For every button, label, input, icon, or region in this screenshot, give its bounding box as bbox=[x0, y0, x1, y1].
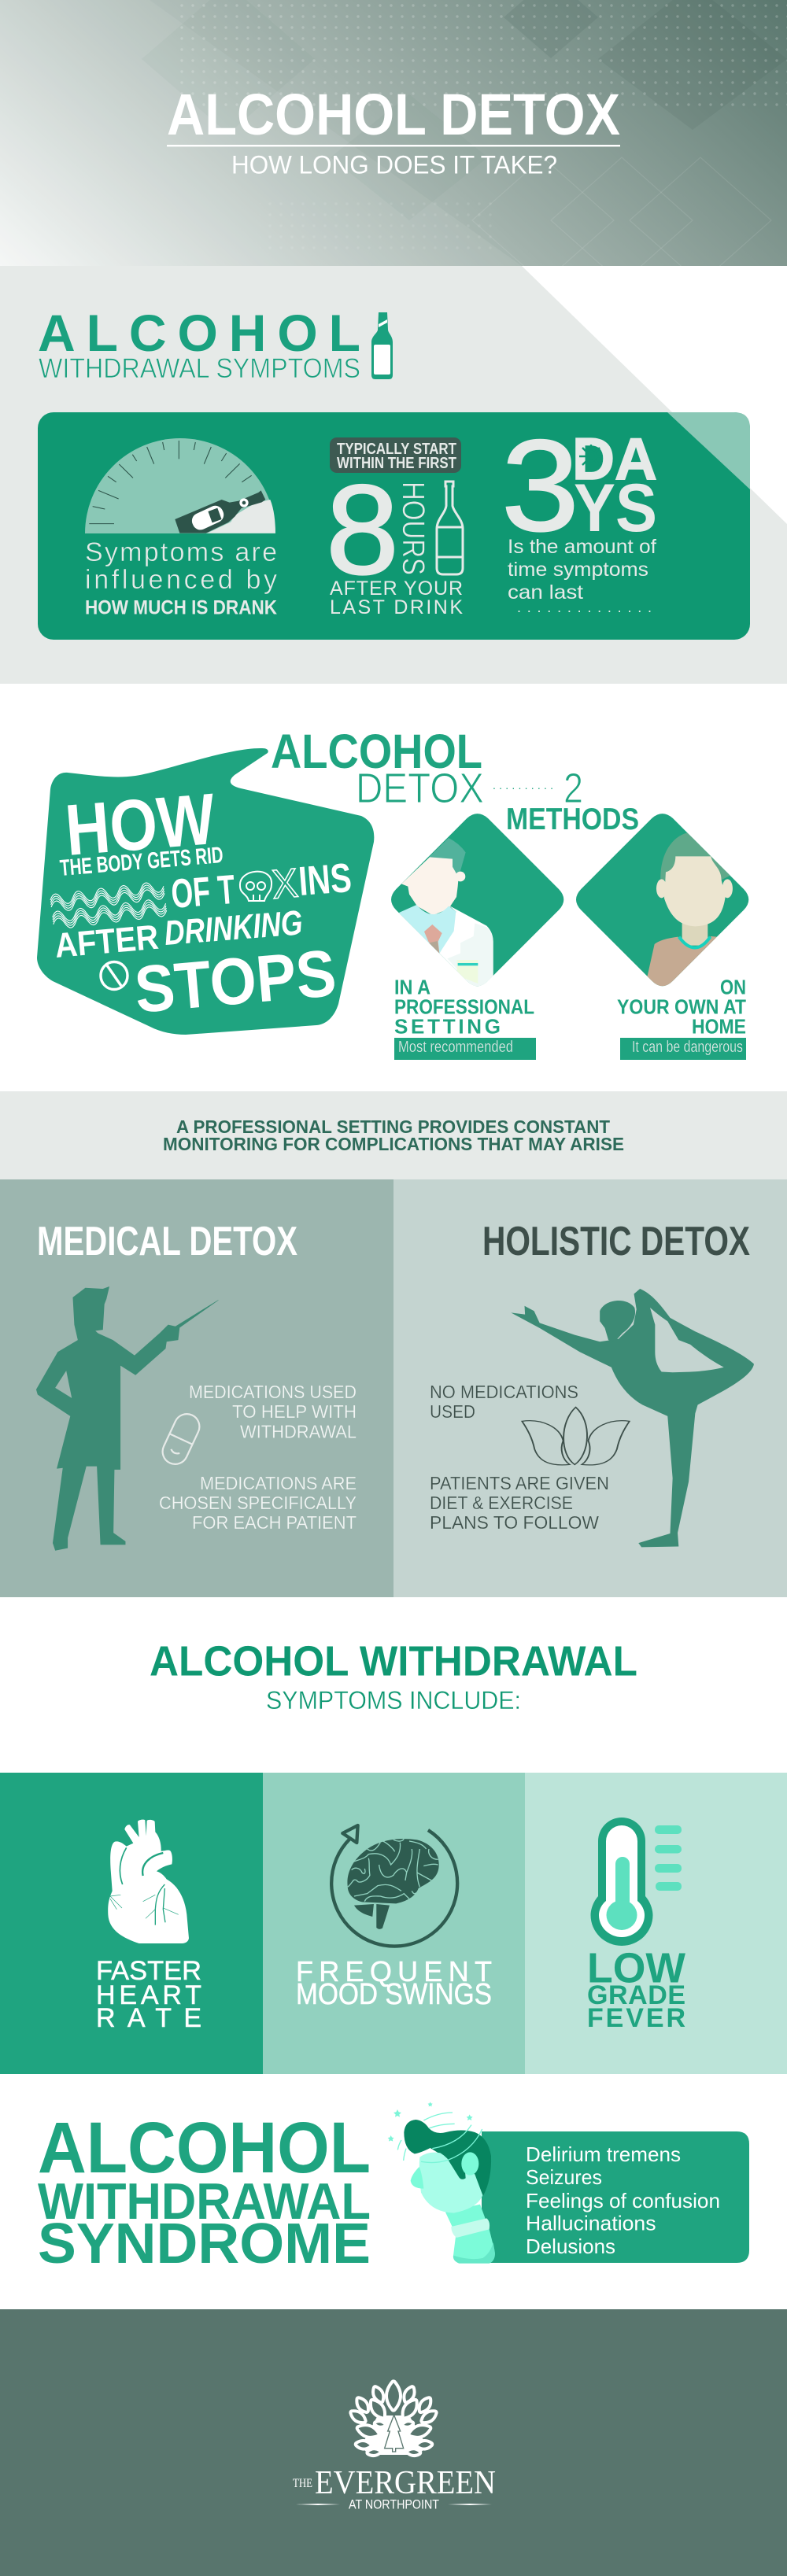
panel: speech bubble bbox=[37, 748, 374, 1035]
text: faster heart rate: HEART bbox=[96, 1980, 201, 2010]
panel: medical detox bbox=[0, 1179, 394, 1597]
text: in a professional setting: IN A bbox=[394, 976, 430, 999]
icon: dizzy head bbox=[388, 2102, 495, 2264]
panel: syndrome symptom list bbox=[482, 2131, 749, 2263]
logo text: the evergreen at northpoint: THE bbox=[293, 2477, 312, 2490]
text: symptoms are influenced by: Symptoms are bbox=[85, 537, 277, 567]
text: of t: OF T bbox=[169, 867, 237, 917]
text: medications used: WITHDRAWAL bbox=[240, 1421, 357, 1441]
panel: footer bbox=[0, 2309, 787, 2576]
stat: 8 hours: 8 bbox=[326, 459, 399, 601]
panel: syndrome symptom list: Hallucinations bbox=[526, 2211, 656, 2235]
text: symptoms are influenced by: HOW MUCH IS DRANK bbox=[85, 596, 277, 618]
panel: low grade fever bbox=[525, 1773, 787, 2074]
text: symptoms are influenced by bbox=[85, 537, 277, 618]
panel: holistic detox bbox=[394, 1179, 787, 1597]
panel: frequent mood swings bbox=[263, 1773, 525, 2074]
panel: syndrome symptom list: Seizures bbox=[526, 2165, 602, 2189]
panel: withdrawal symptoms section background bbox=[0, 266, 787, 684]
text: symptoms are influenced by: influenced by bbox=[85, 565, 277, 595]
text: the body gets rid: THE BODY GETS RID bbox=[59, 843, 224, 881]
panel: professional setting note: MONITORING FOR COMPLICATIONS THAT MAY ARISE bbox=[163, 1134, 624, 1154]
label: most recommended: Most recommended bbox=[398, 1039, 513, 1056]
label: typically start pill: WITHIN THE FIRST bbox=[337, 455, 456, 472]
icon: brain in cycle arrow bbox=[331, 1825, 457, 1947]
text: low grade fever: LOW bbox=[587, 1945, 685, 1992]
label: typically start pill: TYPICALLY START bbox=[337, 441, 456, 458]
text: in a professional setting: SETTING bbox=[394, 1015, 501, 1039]
icon: doctor with pointer silhouette bbox=[36, 1286, 218, 1551]
heading: alcohol detox 2 methods bbox=[271, 725, 639, 836]
icon: at home person diamond bbox=[576, 814, 748, 991]
text: after: AFTER bbox=[54, 918, 160, 965]
text: diet and exercise plans: PATIENTS ARE GIVEN bbox=[430, 1473, 609, 1493]
heading: alcohol withdrawal syndrome: WITHDRAWAL bbox=[38, 2172, 371, 2230]
stat: 8 hours: HOURS bbox=[396, 482, 430, 575]
heading: alcohol withdrawal syndrome bbox=[38, 2108, 371, 2275]
heading: alcohol withdrawal syndrome: ALCOHOL bbox=[38, 2108, 371, 2188]
text: amount of time bbox=[508, 536, 656, 615]
text: low grade fever: GRADE bbox=[587, 1980, 685, 2010]
icon: sun burst bbox=[579, 445, 603, 468]
icon: heart bbox=[108, 1820, 189, 1943]
heading: alcohol detox 2 methods: ALCOHOL bbox=[271, 725, 482, 778]
text: no medications used: USED bbox=[430, 1401, 475, 1422]
logo text: the evergreen at northpoint bbox=[293, 2465, 496, 2511]
text: drinking: DRINKING bbox=[163, 903, 304, 953]
logo: evergreen peacock emblem bbox=[350, 2382, 437, 2455]
text: amount of time: Is the amount of bbox=[508, 536, 656, 558]
text: how: HOW bbox=[62, 779, 218, 871]
text: after your last drink bbox=[330, 578, 463, 618]
panel: green stats card bbox=[38, 412, 750, 640]
text: diet and exercise plans: DIET & EXERCISE bbox=[430, 1493, 573, 1513]
heading: alcohol detox 2 methods: 2 bbox=[563, 765, 583, 812]
heading: alcohol withdrawal symptoms: WITHDRAWAL SYMPTOMS bbox=[39, 353, 360, 384]
text: medications used: MEDICATIONS USED bbox=[189, 1382, 357, 1402]
text: after your last drink: AFTER YOUR bbox=[330, 578, 463, 600]
text: amount of time: can last bbox=[508, 581, 583, 603]
text: amount of time: .............. bbox=[517, 600, 652, 615]
decoration: waves bbox=[50, 880, 168, 930]
text: medications chosen bbox=[159, 1473, 357, 1533]
text: diet and exercise plans: PLANS TO FOLLOW bbox=[430, 1512, 599, 1533]
text: ins: INS bbox=[297, 855, 353, 905]
icon: crossed bones letter X: X bbox=[270, 861, 300, 908]
heading: alcohol withdrawal symptoms include: ALCOHOL WITHDRAWAL bbox=[150, 1638, 637, 1685]
heading: alcohol detox 2 methods: METHODS bbox=[506, 803, 639, 836]
heading: medical detox: MEDICAL DETOX bbox=[37, 1219, 297, 1264]
text: medications chosen: MEDICATIONS ARE bbox=[200, 1473, 357, 1493]
text: on your own at home: HOME bbox=[692, 1015, 746, 1039]
panel: syndrome symptom list: Delirium tremens bbox=[526, 2142, 681, 2166]
heading: alcohol withdrawal symptoms include: SYMPTOMS INCLUDE: bbox=[266, 1686, 521, 1714]
text: frequent mood swings: FREQUENT bbox=[296, 1955, 492, 1987]
text: stops: STOPS bbox=[131, 936, 339, 1027]
text: on your own at home: ON bbox=[720, 976, 746, 999]
panel: syndrome symptom list: Feelings of confusion bbox=[526, 2189, 720, 2212]
text: medications used bbox=[189, 1382, 357, 1441]
stat: 3 days: YS bbox=[574, 471, 657, 546]
icon: thermometer bbox=[590, 1818, 682, 1946]
stat: 3 days: DA bbox=[572, 426, 657, 492]
text: medications chosen: FOR EACH PATIENT bbox=[192, 1512, 357, 1533]
text: frequent mood swings: MOOD SWINGS bbox=[296, 1978, 492, 2011]
panel: header banner bbox=[0, 0, 787, 283]
panel: professional setting note bbox=[0, 1091, 787, 1179]
text: no medications used bbox=[430, 1382, 578, 1422]
icon: capsule bbox=[158, 1410, 204, 1468]
title: ALCOHOL DETOX bbox=[167, 82, 620, 147]
text: medications chosen: CHOSEN SPECIFICALLY bbox=[159, 1493, 357, 1513]
text: low grade fever bbox=[587, 1945, 685, 2033]
panel: faster heart rate bbox=[0, 1773, 263, 2074]
icon: professional doctor diamond bbox=[391, 814, 563, 991]
heading: alcohol withdrawal symptoms: ALCOHOL bbox=[38, 304, 360, 362]
label: it can be dangerous: It can be dangerous bbox=[632, 1039, 743, 1056]
text: diet and exercise plans bbox=[430, 1473, 609, 1533]
icon: green bottle bbox=[371, 312, 393, 379]
heading: alcohol withdrawal syndrome: SYNDROME bbox=[38, 2212, 371, 2275]
text: on your own at home: YOUR OWN AT bbox=[617, 995, 746, 1019]
icon: bottle outline bbox=[437, 482, 463, 574]
stat: 3 days: 3 bbox=[501, 413, 579, 558]
text: after your last drink: LAST DRINK bbox=[330, 596, 463, 618]
text: in a professional setting: PROFESSIONAL bbox=[394, 995, 534, 1019]
text: frequent mood swings bbox=[296, 1955, 492, 2011]
icon: yoga pose silhouette bbox=[511, 1289, 754, 1547]
text: faster heart rate: RATE bbox=[96, 2003, 201, 2033]
title underline bbox=[167, 145, 620, 146]
text: low grade fever: FEVER bbox=[587, 2003, 685, 2033]
text: faster heart rate bbox=[96, 1956, 201, 2033]
label: typically start pill bbox=[330, 437, 461, 473]
logo text: the evergreen at northpoint: EVERGREEN bbox=[315, 2465, 496, 2501]
heading: alcohol detox 2 methods: .......... bbox=[493, 779, 553, 792]
heading: alcohol detox 2 methods: DETOX bbox=[356, 765, 484, 812]
panel: professional setting note: A PROFESSIONAL SETTING PROVIDES CONSTANT bbox=[176, 1116, 610, 1137]
text: no medications used: NO MEDICATIONS bbox=[430, 1382, 578, 1402]
text: medications used: TO HELP WITH bbox=[232, 1401, 357, 1422]
logo text: the evergreen at northpoint: AT NORTHPOINT bbox=[349, 2497, 439, 2511]
stat: 8 hours bbox=[326, 459, 430, 601]
text: faster heart rate: FASTER bbox=[96, 1956, 201, 1986]
chart: drink gauge bbox=[85, 438, 275, 533]
icon: no symbol bbox=[101, 961, 127, 990]
text: in a professional setting bbox=[394, 976, 534, 1039]
text: amount of time: time symptoms bbox=[508, 559, 648, 581]
heading: alcohol withdrawal symptoms include bbox=[150, 1638, 637, 1714]
icon: skull bbox=[240, 872, 272, 901]
subtitle: HOW LONG DOES IT TAKE? bbox=[231, 151, 557, 179]
icon: lotus bbox=[522, 1408, 630, 1465]
label: it can be dangerous bbox=[620, 1038, 746, 1060]
stat: 3 days bbox=[501, 413, 657, 558]
panel: syndrome symptom list: Delusions bbox=[526, 2235, 615, 2258]
text: on your own at home bbox=[617, 976, 746, 1039]
